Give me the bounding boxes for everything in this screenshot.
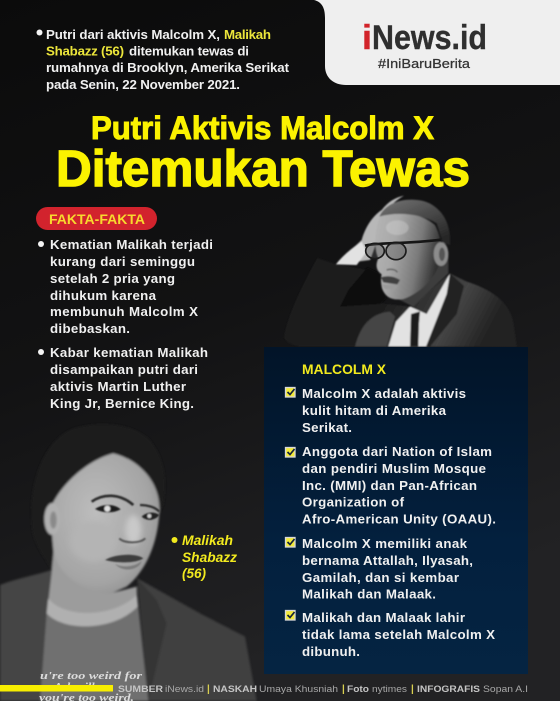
shirt slogan text xyxy=(38,671,142,701)
fact 2: King Jr, Bernice King. xyxy=(50,396,194,411)
item 2: Organization of xyxy=(302,494,405,510)
item 4: Malikah dan Malaak lahir xyxy=(302,610,465,625)
fact 1: dihukum karena xyxy=(50,288,157,303)
footer credits: NASKAH xyxy=(213,684,257,695)
facts list xyxy=(38,237,213,411)
item 1: Malcolm X adalah aktivis xyxy=(302,386,466,401)
item 1: kulit hitam di Amerika xyxy=(302,403,447,418)
fact 2 xyxy=(38,345,208,411)
logo wordmark: i xyxy=(362,19,372,57)
footer credits xyxy=(118,684,528,695)
intro text block: rumahnya di Brooklyn, Amerika Serikat xyxy=(46,60,290,75)
intro text block xyxy=(36,27,290,92)
logo wordmark: News.id xyxy=(372,19,487,57)
intro text block: Putri dari aktivis Malcolm X, xyxy=(46,27,220,42)
footer credits: Sopan A.I xyxy=(483,684,528,695)
title: Putri Aktivis Malcolm X xyxy=(91,110,434,146)
fact 1 xyxy=(38,237,213,336)
item 3: Malcolm X memiliki anak xyxy=(302,536,468,551)
fact 2: aktivis Martin Luther xyxy=(50,379,186,394)
intro text block: pada Senin, 22 November 2021. xyxy=(46,77,240,92)
item 2: Anggota dari Nation of Islam xyxy=(302,444,492,459)
shirt slogan text: u're too weird for xyxy=(40,671,142,682)
footer credits: nytimes xyxy=(372,684,407,695)
forearm and hand xyxy=(336,196,404,264)
fact 1: kurang dari seminggu xyxy=(50,254,195,269)
logo tagline: #IniBaruBerita xyxy=(378,56,471,71)
intro text block: Malikah xyxy=(224,27,271,42)
panel heading: MALCOLM X xyxy=(302,362,386,377)
fact 2: disampaikan putri dari xyxy=(50,362,198,377)
fact 1: setelah 2 pria yang xyxy=(50,271,175,286)
item 3: Gamilah, dan si kembar xyxy=(302,570,459,585)
badge: FAKTA-FAKTA: FAKTA-FAKTA xyxy=(49,211,145,227)
item 4: tidak lama setelah Malcolm X xyxy=(302,627,495,642)
footer credits: Umaya Khusniah xyxy=(259,684,338,695)
item 2: Afro-American Unity (OAAU). xyxy=(302,512,496,526)
panel: Malcolm X facts xyxy=(264,347,528,674)
item 3 xyxy=(286,536,473,602)
item 1 xyxy=(286,386,466,435)
footer credits: Foto xyxy=(347,684,369,695)
title: Ditemukan Tewas xyxy=(56,140,470,197)
intro text block: Shabazz (56) xyxy=(46,44,124,58)
photo caption: Shabazz xyxy=(182,549,237,565)
item 2 xyxy=(286,444,496,526)
item 2: dan pendiri Muslim Mosque xyxy=(302,461,486,476)
face xyxy=(375,213,442,299)
fact 1: Kematian Malikah terjadi xyxy=(50,237,213,252)
item 3: bernama Attallah, Ilyasah, xyxy=(302,553,473,568)
item 2: Inc. (MMI) dan Pan-African xyxy=(302,478,477,493)
shirt slogan text: Asheville xyxy=(53,682,101,693)
footer bar xyxy=(0,685,113,692)
title xyxy=(56,110,470,197)
item 4: dibunuh. xyxy=(302,644,360,659)
neck xyxy=(390,252,448,307)
fact 1: membunuh Malcolm X xyxy=(50,304,198,319)
footer credits: iNews.id xyxy=(165,684,204,695)
badge: FAKTA-FAKTA xyxy=(36,207,157,230)
item 3: Malikah dan Malaak. xyxy=(302,586,436,602)
intro text block: ditemukan tewas di xyxy=(129,44,249,58)
fact 2: Kabar kematian Malikah xyxy=(50,345,208,360)
footer credits: INFOGRAFIS xyxy=(417,684,480,695)
fact 1: dibebaskan. xyxy=(50,321,130,336)
photo caption: Malikah xyxy=(182,532,233,548)
footer credits: | xyxy=(207,684,210,695)
photo: Malcolm X xyxy=(284,196,517,347)
footer credits: | xyxy=(342,684,345,695)
footer credits: | xyxy=(411,684,414,695)
item 1: Serikat. xyxy=(302,420,352,435)
footer credits: SUMBER xyxy=(118,684,163,695)
photo caption: (56) xyxy=(182,565,206,581)
item 4 xyxy=(286,610,495,659)
photo: Malikah Shabazz xyxy=(0,424,257,701)
photo caption xyxy=(172,532,237,581)
logo panel xyxy=(314,0,560,85)
